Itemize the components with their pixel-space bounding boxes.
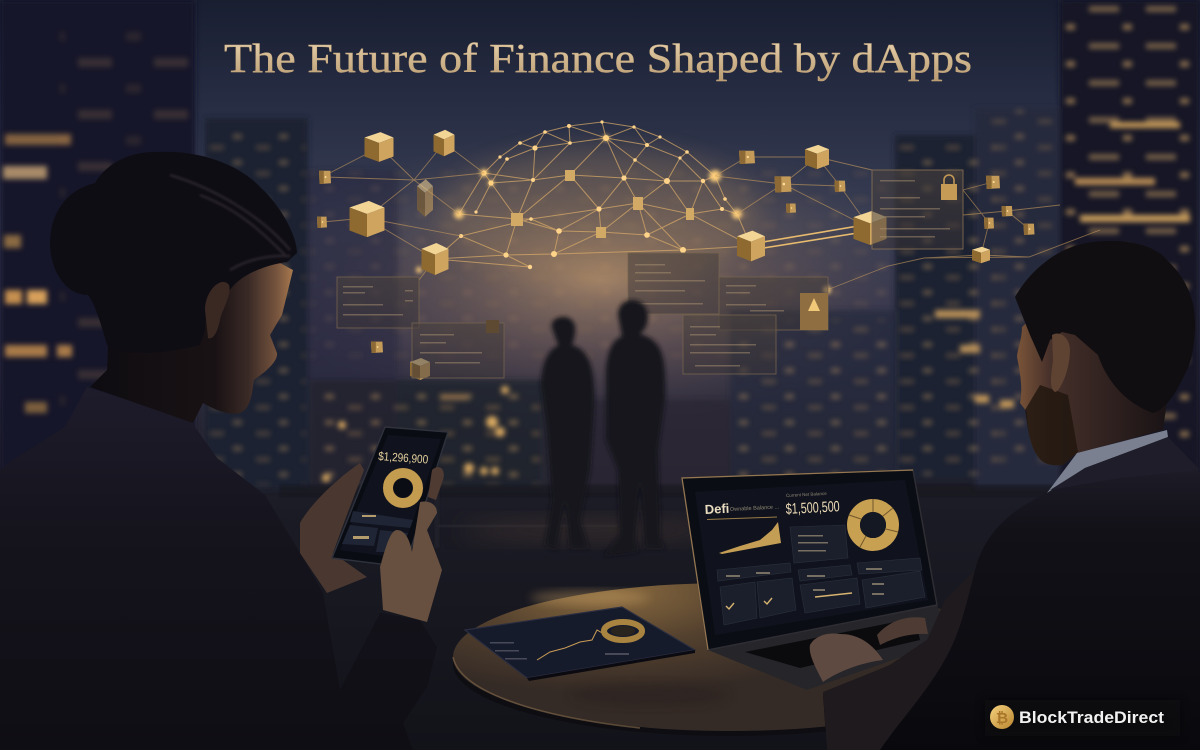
dashboard balance: $1,500,500 (785, 498, 840, 518)
shirt collar (1047, 430, 1168, 493)
logo: BlockTradeDirect (985, 700, 1180, 736)
laptop with DeFi dashboard: Current Net Balance (786, 491, 827, 498)
suit collar (1050, 437, 1200, 490)
blockchain dome network (416, 120, 831, 294)
hand holding phone (back) (300, 463, 367, 593)
hair (50, 152, 297, 353)
tablet donut (604, 622, 642, 640)
bright glowing nodes (416, 135, 831, 294)
network lines to side cubes (320, 143, 1100, 290)
hand on keyboard right (877, 617, 928, 645)
dashboard checks and rows (726, 593, 852, 609)
jacket and sleeve (0, 387, 437, 750)
icon: padlock (941, 175, 957, 200)
panel: contract five (683, 315, 776, 374)
person: man standing (604, 300, 665, 556)
dome glow (440, 145, 760, 285)
icon: warning triangle (800, 293, 828, 330)
sleeve highlight (823, 570, 975, 750)
phone (332, 427, 448, 567)
dashboard cards (717, 525, 925, 625)
building window lights (3, 0, 1200, 490)
man seated (810, 241, 1200, 750)
ear (1051, 333, 1070, 392)
dome cubes (511, 170, 694, 238)
neck and face (1017, 290, 1170, 465)
ear (205, 282, 230, 338)
icon: bitcoin coin (990, 705, 1014, 729)
laptop with DeFi dashboard: Ownable Balance ... (730, 504, 780, 513)
gold blockchain cubes (317, 130, 1034, 380)
phone rows (342, 511, 413, 552)
title: The Future of Finance Shaped by dApps (224, 35, 972, 81)
hair (1015, 241, 1195, 413)
gold double link (751, 224, 870, 250)
laptop base (708, 605, 950, 690)
floating contract panels (337, 170, 963, 378)
warm glow behind network (270, 130, 930, 430)
panel: contract one (337, 277, 419, 328)
finger behind phone edge (428, 467, 444, 500)
panel: contract four with warning (719, 277, 828, 330)
neck and face (90, 220, 293, 423)
beard (1025, 385, 1078, 465)
railing and rooftop terrace (280, 483, 1080, 548)
silhouettes of two people (541, 300, 665, 556)
dome wireframe (435, 122, 751, 267)
phone balance: $1,296,900 (378, 449, 429, 466)
laptop screen (682, 470, 937, 650)
table (453, 583, 1007, 736)
dashboard heading: Defi (704, 501, 730, 517)
icon: bitcoin coin: ₿ (996, 710, 1008, 727)
brand name: BlockTradeDirect (1019, 708, 1164, 727)
panel: contract two (412, 320, 504, 378)
panel: contract three (628, 253, 719, 314)
logo backdrop (985, 700, 1180, 736)
hair strands (170, 175, 290, 270)
tablet on table (465, 607, 695, 681)
right hand over phone (380, 502, 442, 622)
dome nodes (459, 120, 727, 269)
person: woman standing (541, 317, 594, 550)
panel: lock contract (872, 170, 963, 249)
phone donut (388, 473, 418, 503)
suit and arm (823, 435, 1200, 750)
hand on keyboard left (810, 633, 883, 682)
dashboard donut (849, 499, 898, 547)
woman seated (0, 152, 448, 750)
dashboard area chart (719, 522, 781, 554)
laptop with DeFi dashboard (682, 470, 950, 690)
blurred skyline buildings (0, 0, 1200, 490)
